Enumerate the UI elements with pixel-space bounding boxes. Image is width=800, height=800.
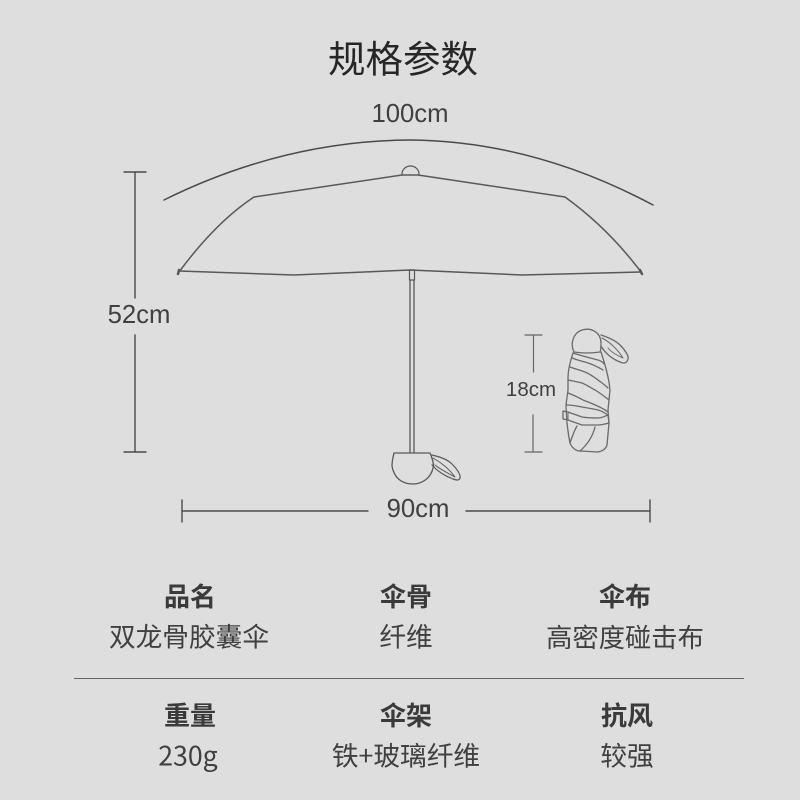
- spec value: 高密度碰击布: 高密度碰击布: [546, 615, 704, 654]
- dimension line: height 52cm: [124, 172, 146, 452]
- spec: 抗风: 抗风: [601, 696, 653, 733]
- icon: open umbrella: [178, 166, 642, 484]
- label: 18cm: 18cm: [506, 378, 556, 401]
- spec: 伞布: 伞布: [599, 577, 651, 614]
- spec: 伞骨: 伞骨: [380, 577, 432, 614]
- spec value: 230g: 230g: [158, 735, 218, 774]
- spec: 品名: 品名: [164, 577, 216, 614]
- title: 规格参数: [328, 38, 478, 80]
- spec value: 纤维: 纤维: [379, 615, 433, 654]
- dimension line: width 90cm: [182, 500, 650, 522]
- label: 52cm: 52cm: [108, 301, 170, 329]
- label: 90cm: 90cm: [387, 495, 449, 523]
- dimension line: folded 18cm: [525, 335, 542, 452]
- divider: [74, 678, 744, 679]
- arc: canopy width measure: [164, 140, 653, 205]
- spec value: 较强: 较强: [600, 735, 654, 774]
- spec: 伞架: 伞架: [380, 696, 432, 733]
- icon: folded capsule umbrella: [563, 329, 628, 452]
- spec value: 双龙骨胶囊伞: 双龙骨胶囊伞: [109, 615, 269, 654]
- spec: 重量: 重量: [164, 696, 216, 733]
- label: 100cm: 100cm: [371, 100, 449, 128]
- spec value: 铁+玻璃纤维: 铁+玻璃纤维: [332, 734, 480, 773]
